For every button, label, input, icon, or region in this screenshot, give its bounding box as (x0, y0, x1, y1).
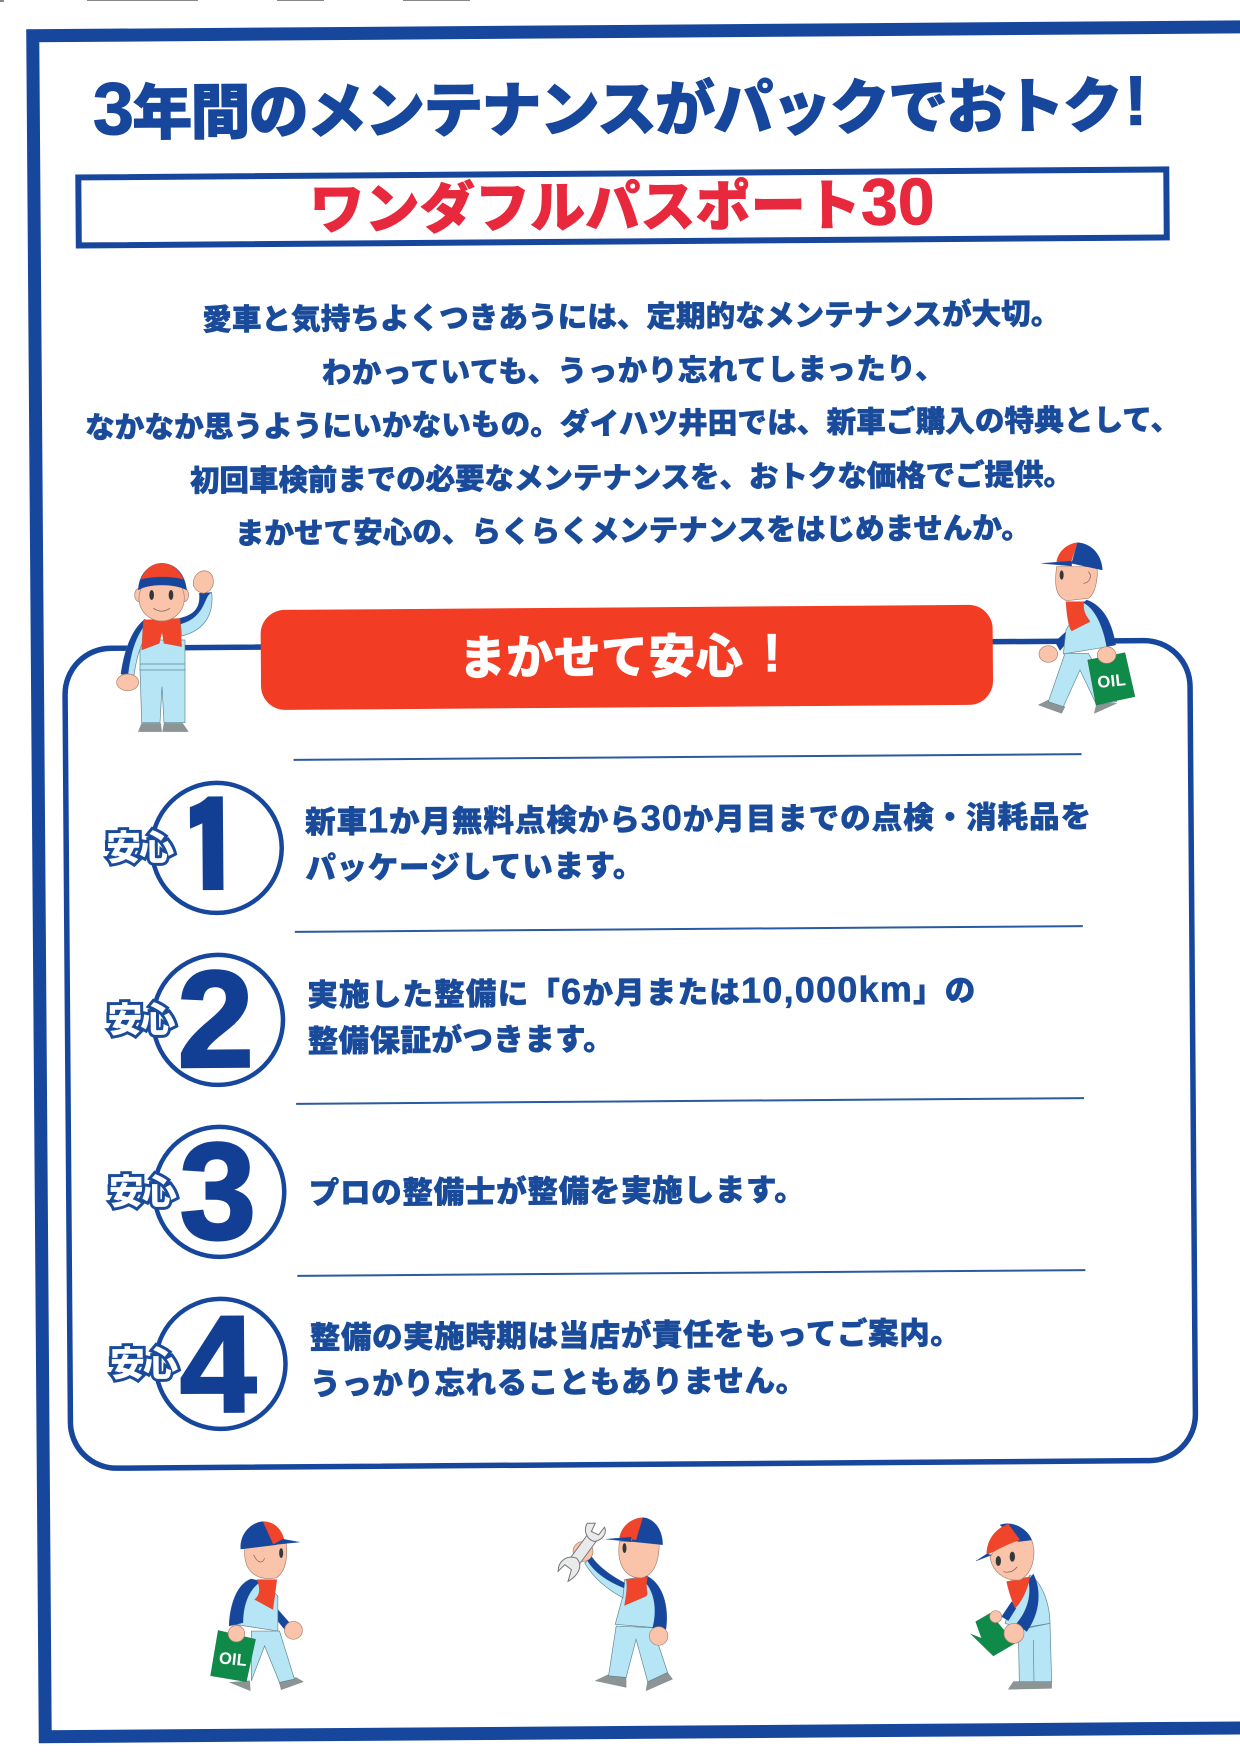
badge 1: 1 (181, 787, 241, 906)
intro paragraph: まかせて安心の、らくらくメンテナンスをはじめませんか。 (235, 512, 1031, 551)
icon: mechanic holding wrench (558, 1518, 673, 1691)
badge 4 (109, 1288, 286, 1442)
badge 4: 安心 (110, 1345, 178, 1384)
badge 2 (107, 943, 284, 1097)
subtitle box (78, 162, 1167, 245)
intro paragraph: 愛車と気持ちよくつきあうには、定期的なメンテナンスが大切。 (202, 297, 1060, 337)
badge 2: 安心 (107, 1001, 176, 1040)
intro paragraph: わかっていても、うっかり忘れてしまったり、 (322, 353, 945, 390)
item 4 text: うっかり忘れることもありません。 (310, 1364, 806, 1402)
badge 3: 3 (179, 1115, 256, 1269)
item 1 text (305, 794, 1091, 886)
item 3 text: プロの整備士が整備を実施します。 (309, 1172, 805, 1211)
icon: mechanic reading green booklet (971, 1524, 1052, 1689)
item 2 text (307, 968, 976, 1059)
panel heading: ! (763, 623, 781, 683)
badge 3: 安心 (109, 1173, 177, 1212)
item 2 (107, 938, 976, 1097)
icon: mechanic walking with oil can, lower left (211, 1522, 303, 1691)
badge 1 (106, 782, 282, 914)
intro paragraph: 初回車検前までの必要なメンテナンスを、おトクな価格でご提供。 (190, 458, 1073, 498)
panel heading (260, 605, 993, 710)
badge 4: 4 (179, 1288, 257, 1442)
icon: mechanic walking with oil can (1038, 543, 1135, 713)
badge 3 (108, 1115, 285, 1269)
item 4 (109, 1283, 962, 1442)
title: 3年間のメンテナンスがパックでおトク (92, 60, 1123, 150)
icon: mechanic walking with oil can, lower left: OIL (218, 1648, 248, 1670)
item 3 (108, 1111, 805, 1269)
icon: mechanic walking with oil can: OIL (1096, 670, 1127, 692)
subtitle: ワンダフルパスポート30 (309, 164, 935, 243)
item 2 text: 実施した整備に「6か月または10,000km」の (307, 968, 975, 1014)
badge 1: 安心 (106, 829, 174, 868)
icon: mechanic waving (117, 563, 213, 732)
intro paragraph: なかなか思うようにいかないもの。ダイハツ井田では、新車ご購入の特典として、 (85, 403, 1180, 445)
item 4 text: 整備の実施時期は当店が責任をもってご案内。 (310, 1315, 961, 1355)
intro paragraph (84, 296, 1181, 552)
item 4 text (310, 1315, 961, 1402)
panel: reassurance list (64, 603, 1196, 1469)
badge 2: 2 (177, 943, 254, 1097)
item 1 text: パッケージしています。 (305, 849, 643, 886)
item 1 (106, 777, 1092, 914)
title: ! (1124, 62, 1148, 140)
item 1 text: 新車1か月無料点検から30か月目までの点検・消耗品を (305, 794, 1091, 841)
panel heading: まかせて安心 (459, 630, 743, 685)
item 2 text: 整備保証がつきます。 (308, 1022, 614, 1059)
